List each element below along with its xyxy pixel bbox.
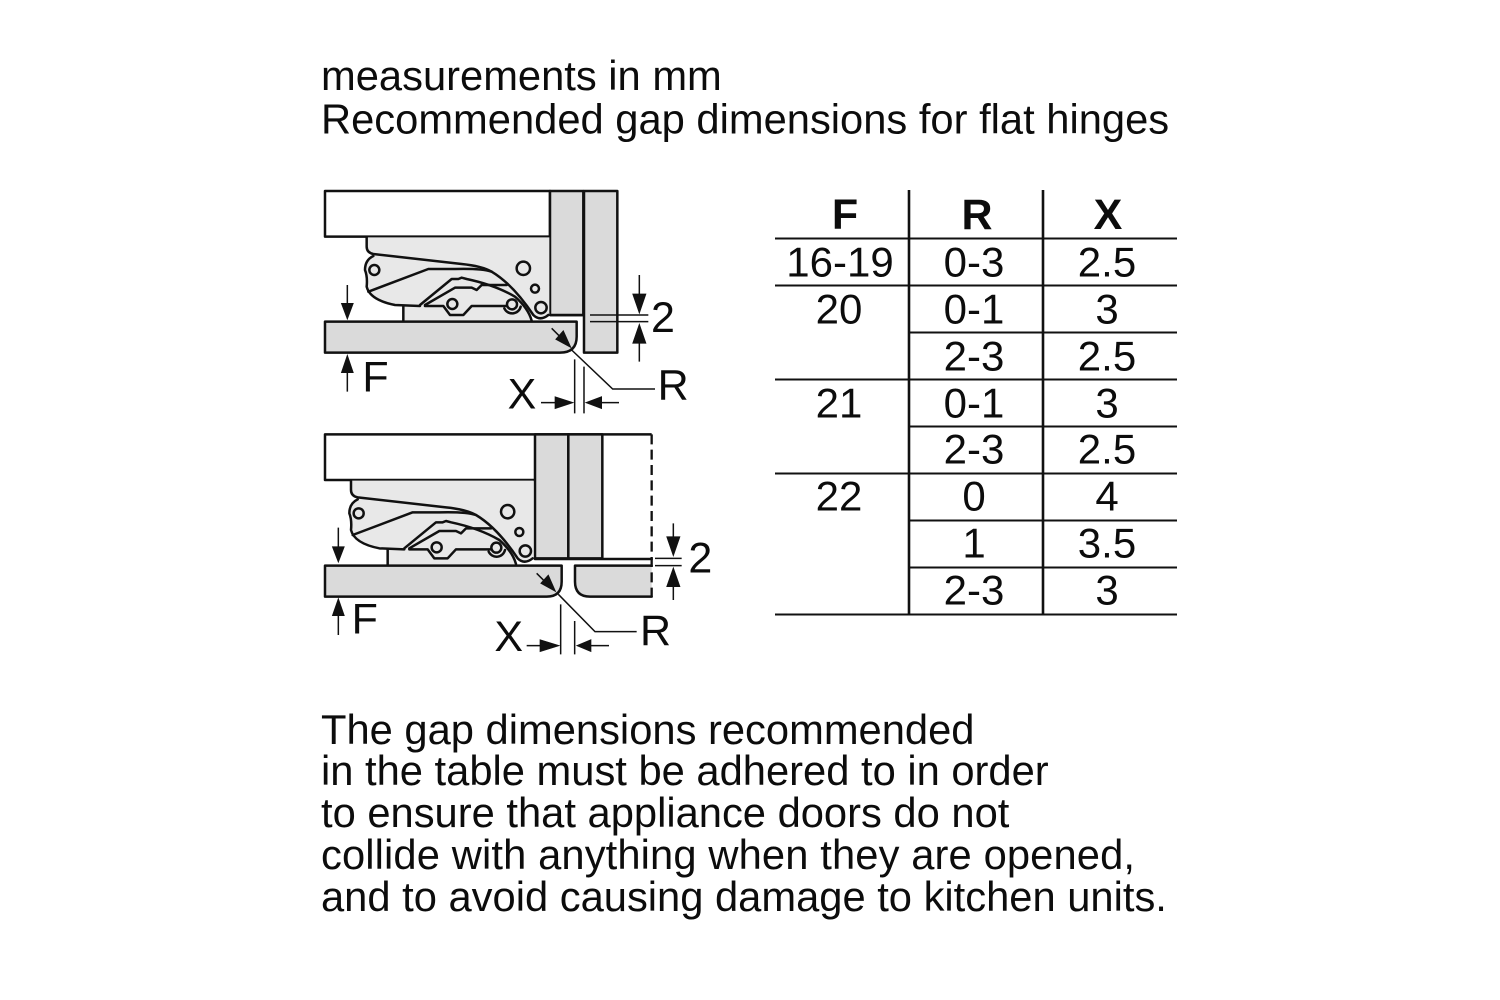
heading — [321, 52, 1169, 142]
column X values — [1078, 238, 1136, 614]
column X values: 3.5 — [1078, 520, 1136, 566]
body text: and to avoid causing damage to kitchen units. — [321, 873, 1167, 920]
column F values: 22 — [816, 472, 862, 520]
table: F R X gap dimensions — [775, 190, 1177, 615]
door panel — [325, 322, 577, 353]
dimension: R: R — [640, 607, 671, 655]
heading: Recommended gap dimensions for flat hinges — [321, 96, 1169, 142]
dimension: R — [537, 573, 671, 655]
column X values: 4 — [1095, 472, 1119, 520]
side panels — [550, 191, 617, 353]
column X values: 2.5 — [1078, 332, 1136, 380]
dimension: 2: 2 — [688, 535, 712, 583]
side panels — [535, 434, 652, 559]
dimension: X: X — [494, 613, 523, 661]
table header: F — [832, 191, 858, 239]
door panel right — [575, 566, 652, 597]
dimension: X: X — [508, 370, 536, 418]
column R values: 0 — [962, 472, 986, 520]
column R values: 2-3 — [944, 426, 1004, 472]
dimension: X — [508, 359, 619, 418]
table header: X — [1094, 191, 1123, 239]
dimension: 2: 2 — [651, 294, 675, 342]
diagram: flat hinge with gap between doors — [325, 434, 712, 661]
column R values: 2-3 — [944, 332, 1004, 380]
dimension: F: F — [352, 595, 378, 643]
dimension: 2 — [655, 523, 712, 600]
dimension: F — [341, 285, 389, 401]
dimension: R: R — [658, 361, 689, 409]
hinge — [364, 237, 549, 322]
cabinet top panel — [325, 434, 652, 480]
hinge — [349, 481, 534, 565]
heading: measurements in mm — [321, 52, 722, 99]
column R values: 0-1 — [944, 380, 1004, 426]
body text: in the table must be adhered to in order — [321, 747, 1049, 794]
column F values: 16-19 — [786, 238, 894, 286]
body text: The gap dimensions recommended — [321, 706, 974, 753]
column R values — [944, 238, 1004, 614]
column X values: 2.5 — [1078, 426, 1136, 472]
dimension: X — [494, 604, 609, 661]
column X values: 3 — [1095, 286, 1119, 332]
cabinet top panel — [325, 191, 550, 237]
dimension: 2 — [590, 275, 675, 362]
column X values: 2.5 — [1078, 238, 1136, 286]
dimension: R — [552, 328, 689, 409]
table header — [832, 191, 1123, 239]
body text: to ensure that appliance doors do not — [321, 789, 1010, 836]
diagram: flat hinge with adjacent door — [325, 191, 689, 418]
dimension: F: F — [362, 353, 389, 401]
column F values: 20 — [816, 286, 862, 332]
dashed edge — [648, 434, 655, 597]
table grid — [775, 190, 1177, 615]
column R values: 0-3 — [944, 238, 1004, 286]
body text — [321, 706, 1167, 920]
column X values: 3 — [1095, 380, 1119, 426]
table header: R — [961, 191, 993, 239]
column X values: 3 — [1095, 566, 1119, 614]
column F values — [786, 238, 894, 520]
column R values: 0-1 — [944, 286, 1004, 332]
dimension: F — [332, 528, 378, 643]
column R values: 1 — [962, 520, 986, 566]
column F values: 21 — [816, 380, 862, 426]
body text: collide with anything when they are opened, — [321, 831, 1135, 878]
column R values: 2-3 — [944, 566, 1004, 614]
door panel left — [325, 566, 562, 597]
